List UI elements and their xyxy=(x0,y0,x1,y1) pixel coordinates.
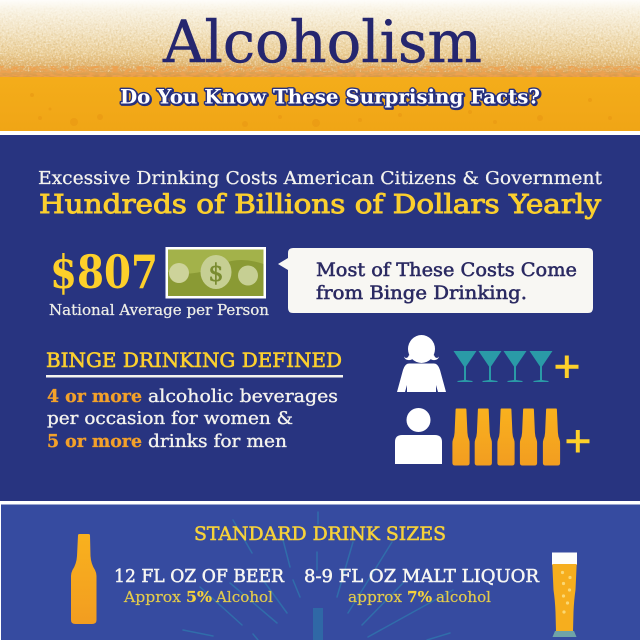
stat: $807: $807 xyxy=(50,245,158,299)
callout: from Binge Drinking. xyxy=(316,283,527,304)
title: Alcoholism xyxy=(162,8,482,76)
heading line two: Hundreds of Billions of Dollars Yearly xyxy=(39,190,601,220)
label: beer alcohol: Approx xyxy=(123,590,181,606)
panel: standard drink sizes xyxy=(1,504,640,640)
binge definition text: drinks for men xyxy=(148,431,287,452)
icon: woman xyxy=(397,335,446,392)
foam highlights xyxy=(0,10,640,72)
white divider lower xyxy=(0,501,640,504)
caption: national average: National Average per Person xyxy=(49,303,269,319)
callout: Most of These Costs Come xyxy=(316,260,577,281)
label: malt liquor size: 8-9 FL OZ MALT LIQUOR xyxy=(304,567,540,587)
panel background xyxy=(1,504,640,640)
icon: martini glasses xyxy=(454,351,552,382)
binge drinking heading: BINGE DRINKING DEFINED xyxy=(46,348,342,372)
heading: standard drink sizes: STANDARD DRINK SIZES xyxy=(194,523,446,545)
label: beer alcohol xyxy=(123,589,273,606)
burst rays xyxy=(183,512,453,640)
icon: man xyxy=(395,408,442,464)
panel background xyxy=(0,135,640,501)
binge definition text: 5 or more xyxy=(47,431,142,452)
icon: beer bottles xyxy=(452,408,560,466)
icon: beer bottle xyxy=(71,534,96,624)
label: malt liquor alcohol xyxy=(348,589,491,606)
heading rule xyxy=(46,375,343,378)
label: beer alcohol: 5% xyxy=(186,589,212,606)
label: malt liquor alcohol: 7% xyxy=(407,589,432,606)
binge definition text xyxy=(47,386,338,452)
orange foam line xyxy=(0,66,640,78)
beer droplets xyxy=(30,93,612,127)
icon: plus women xyxy=(556,356,578,378)
foam texture xyxy=(0,0,640,78)
binge definition text: per occasion for women & xyxy=(47,408,293,429)
icon: plus men xyxy=(566,430,590,452)
icon: beer glass xyxy=(552,552,577,637)
icon: dollar bill xyxy=(166,247,266,298)
beer band xyxy=(0,77,640,131)
white divider xyxy=(0,131,640,135)
panel: costs and binge drinking xyxy=(0,135,640,501)
center bottle silhouette xyxy=(313,608,323,640)
foam background xyxy=(0,0,640,78)
label: malt liquor alcohol: alcohol xyxy=(436,590,491,606)
callout xyxy=(278,248,593,313)
icon: dollar bill: $ xyxy=(208,259,224,287)
label: beer alcohol: Alcohol xyxy=(215,590,273,606)
subtitle: Do You Know These Surprising Facts? xyxy=(120,86,540,108)
label: beer size: 12 FL OZ OF BEER xyxy=(114,567,285,587)
label: malt liquor alcohol: approx xyxy=(348,590,402,606)
binge definition text: 4 or more xyxy=(47,386,142,407)
binge definition text: alcoholic beverages xyxy=(148,386,338,407)
heading line one: Excessive Drinking Costs American Citizens & Government xyxy=(38,169,602,189)
header: beer banner xyxy=(0,0,640,135)
